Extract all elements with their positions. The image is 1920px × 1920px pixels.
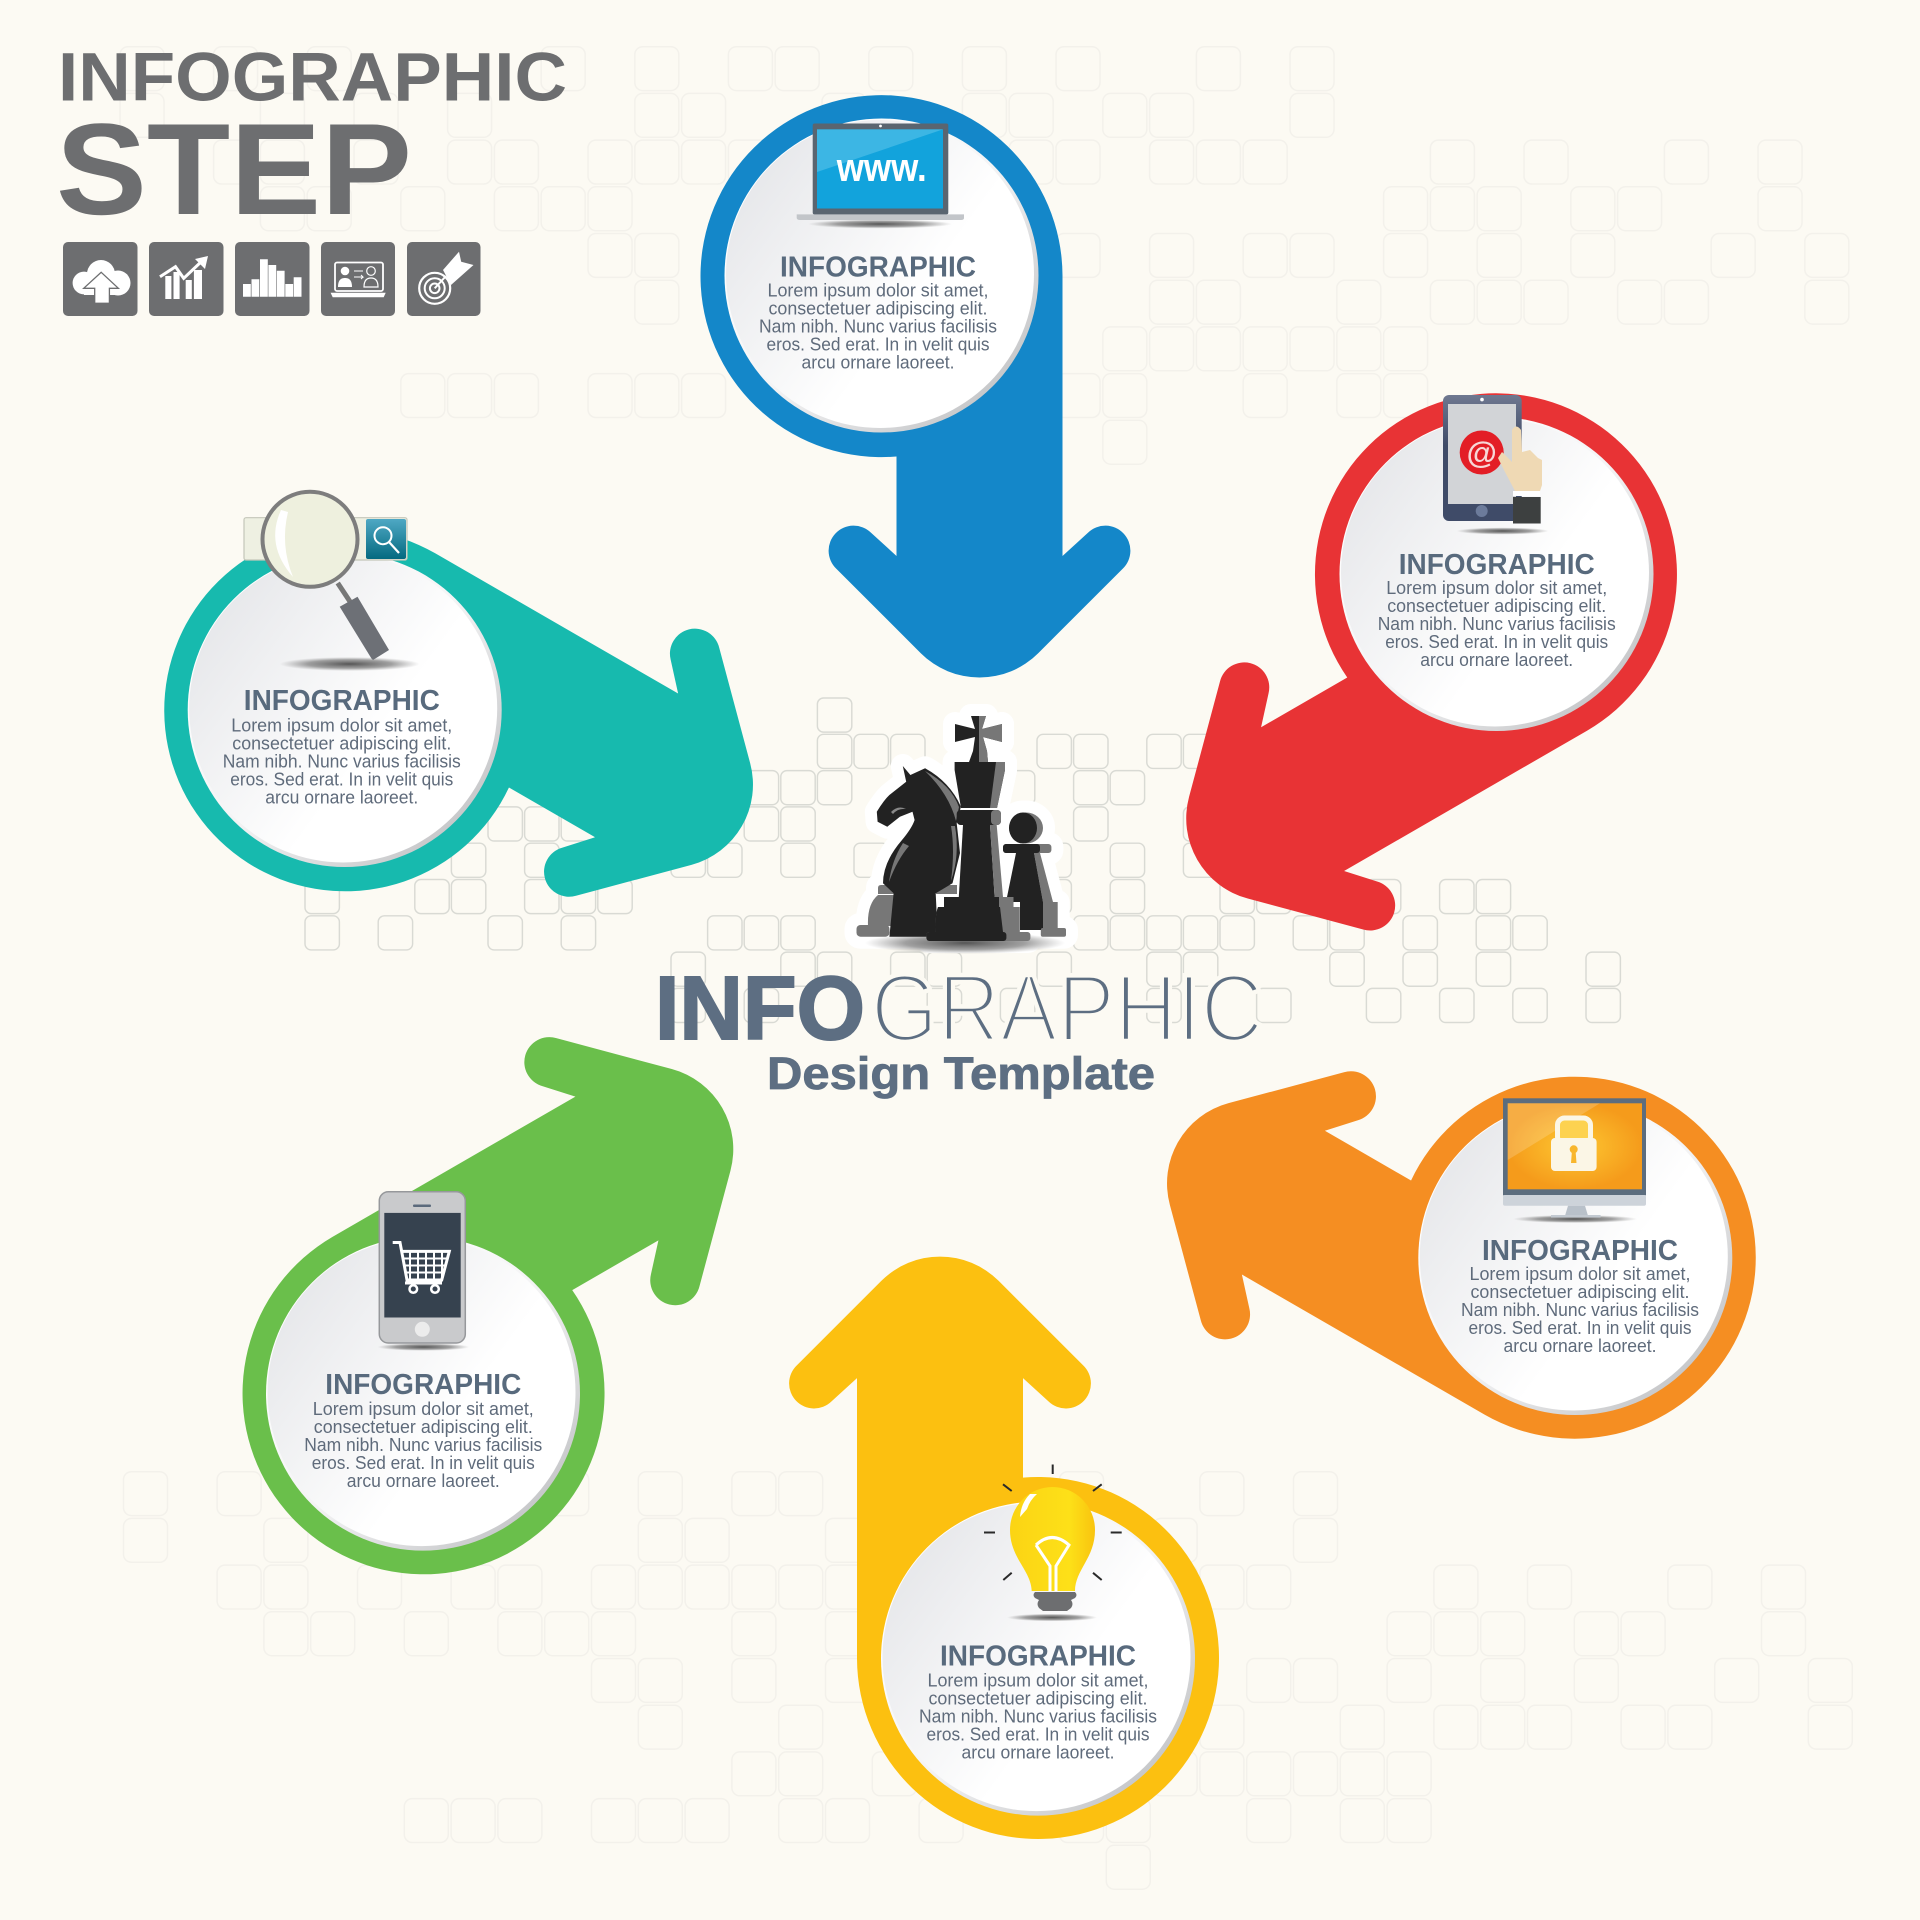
text block: INFOGRAPHIC (1399, 549, 1595, 581)
white disc (881, 1502, 1195, 1816)
text block: INFOGRAPHIC (780, 252, 976, 284)
icon: target and arrow (407, 242, 480, 316)
text block: Lorem ipsum dolor sit amet, (1470, 1264, 1690, 1284)
panel: green arrow step (142, 977, 862, 1641)
text block: consectetuer adipiscing elit. (314, 1417, 533, 1437)
text block: Nam nibh. Nunc varius facilisis (759, 316, 997, 336)
text block: eros. Sed erat. In in velit quis (1385, 632, 1608, 652)
text block: Nam nibh. Nunc varius facilisis (1461, 1300, 1699, 1320)
text block: INFOGRAPHIC (325, 1369, 521, 1401)
text block: INFOGRAPHIC (244, 685, 440, 717)
panel: yellow arrow step (789, 1257, 1219, 1839)
center title: GRAPHIC (871, 955, 1263, 1062)
text block: arcu ornare laoreet. (347, 1471, 500, 1491)
white disc (188, 553, 502, 867)
white disc (1418, 1101, 1732, 1415)
text block (304, 1369, 542, 1491)
text block (1378, 549, 1616, 670)
arrow: blue (701, 95, 1130, 678)
icon: laptop www (797, 124, 964, 228)
text block: arcu ornare laoreet. (265, 788, 418, 808)
text block: Lorem ipsum dolor sit amet, (928, 1671, 1148, 1691)
text block (919, 1641, 1157, 1763)
text block: eros. Sed erat. In in velit quis (312, 1453, 535, 1473)
arrow: green (142, 977, 862, 1641)
text block: eros. Sed erat. In in velit quis (230, 770, 453, 790)
panel: orange arrow step (1103, 900, 1822, 1564)
icon: cloud upload (63, 242, 138, 316)
subtitle: Design Template (767, 1048, 1155, 1099)
text block: Nam nibh. Nunc varius facilisis (304, 1435, 542, 1455)
text block: Lorem ipsum dolor sit amet, (1386, 578, 1607, 598)
text block: consectetuer adipiscing elit. (768, 298, 988, 318)
arrow: orange (1103, 900, 1822, 1564)
text block: arcu ornare laoreet. (1504, 1336, 1656, 1356)
text block: consectetuer adipiscing elit. (928, 1689, 1148, 1709)
text block: arcu ornare laoreet. (802, 352, 954, 372)
text block: INFOGRAPHIC (1482, 1235, 1678, 1267)
arrow: teal (98, 404, 817, 1068)
center title (655, 955, 1263, 1099)
icon: tablet with at sign (1443, 395, 1549, 534)
icon: histogram (235, 242, 310, 316)
text block: INFOGRAPHIC (940, 1641, 1136, 1673)
text block: consectetuer adipiscing elit. (1387, 596, 1606, 616)
icon: tablet with at sign: @ (1467, 435, 1497, 470)
panel: teal arrow step (98, 404, 817, 1068)
text block: Lorem ipsum dolor sit amet, (313, 1399, 534, 1419)
icon: light bulb (984, 1464, 1122, 1621)
white disc (1340, 417, 1654, 731)
text block (223, 685, 461, 808)
text block: arcu ornare laoreet. (962, 1743, 1114, 1763)
white disc (724, 118, 1038, 432)
center title: INFO (655, 959, 865, 1059)
icon row (63, 242, 480, 316)
icon: laptop www: www. (836, 146, 927, 190)
text block: consectetuer adipiscing elit. (1470, 1282, 1690, 1302)
text block: arcu ornare laoreet. (1420, 650, 1573, 670)
white disc (266, 1237, 580, 1551)
arrow: yellow (789, 1257, 1219, 1839)
arrow: red (1058, 327, 1777, 991)
title: infographic step: STEP (56, 96, 412, 242)
icon: laptop with people (321, 242, 395, 316)
panel: red arrow step (1058, 327, 1777, 991)
title: infographic step: INFOGRAPHIC (58, 39, 567, 116)
text block: eros. Sed erat. In in velit quis (766, 334, 990, 354)
text block: Nam nibh. Nunc varius facilisis (919, 1707, 1157, 1727)
icon: chess pieces (856, 716, 1066, 954)
text block: Nam nibh. Nunc varius facilisis (223, 752, 461, 772)
title: infographic step (56, 39, 567, 242)
icon: phone with cart (377, 1192, 469, 1351)
icon: rising chart (149, 242, 224, 316)
panel: blue arrow step (701, 95, 1130, 678)
text block: Lorem ipsum dolor sit amet, (231, 716, 452, 736)
text block (759, 252, 997, 372)
text block: consectetuer adipiscing elit. (232, 734, 451, 754)
text block: eros. Sed erat. In in velit quis (1468, 1318, 1692, 1338)
text block: Nam nibh. Nunc varius facilisis (1378, 614, 1616, 634)
text block: Lorem ipsum dolor sit amet, (768, 280, 988, 300)
text block: eros. Sed erat. In in velit quis (926, 1725, 1150, 1745)
icon: monitor with lock (1503, 1098, 1646, 1223)
text block (1461, 1235, 1699, 1356)
icon: magnifier and search bar (244, 492, 420, 671)
